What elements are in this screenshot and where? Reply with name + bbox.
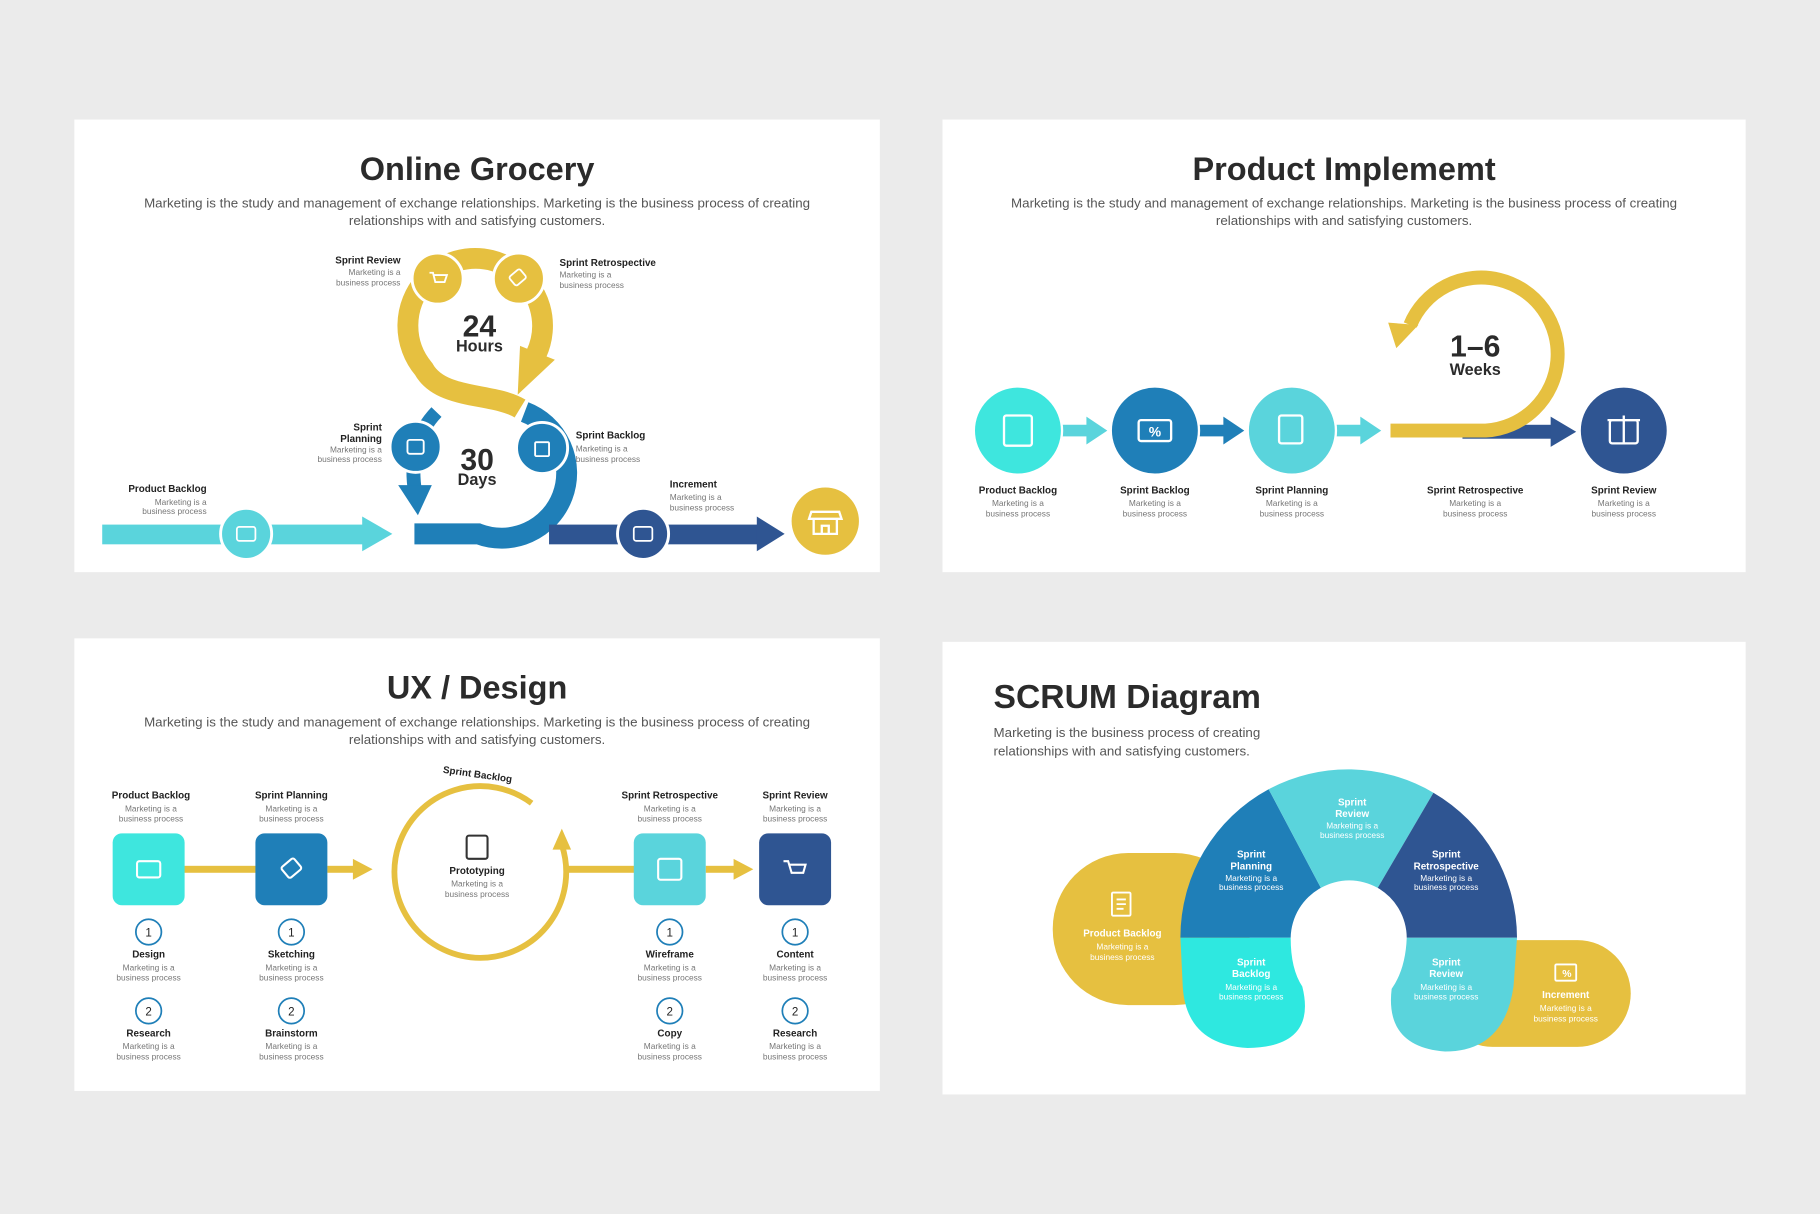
subtitle: relationships with and satisfying customers.: [994, 744, 1250, 759]
labels: Marketing is a: [1129, 498, 1181, 508]
panel: online grocery: Marketing is a: [670, 492, 722, 502]
panel: scrum diagram: %: [1562, 969, 1572, 980]
columns text: business process: [763, 973, 827, 983]
columns text: Product Backlog: [112, 791, 190, 802]
columns text: 2: [288, 1006, 295, 1019]
columns text: 2: [792, 1006, 798, 1019]
panel: product implement: %: [1149, 423, 1161, 439]
columns text: Research: [126, 1028, 171, 1039]
columns text: business process: [638, 1052, 702, 1062]
arrow: navy increment: [549, 508, 785, 559]
segment labels: Marketing is a: [1420, 873, 1473, 883]
columns text: Marketing is a: [644, 803, 696, 813]
step circles: [974, 386, 1668, 475]
yellow loop 1-6 weeks: [1388, 278, 1558, 431]
subtitle: relationships with and satisfying customers.: [349, 732, 605, 747]
panel: online grocery: Marketing is a: [559, 269, 612, 279]
text: 24 Hours: [456, 311, 503, 356]
columns text: Marketing is a: [644, 1041, 696, 1051]
small arrows: [1059, 417, 1381, 445]
segment labels: business process: [1090, 952, 1155, 962]
columns text: business process: [116, 973, 181, 983]
yellow connectors: [183, 859, 753, 880]
subtitle: Marketing is the study and management of exchange relationships. Marketing is the business process of creating: [1011, 196, 1677, 211]
labels: [979, 485, 1657, 518]
text: 1-6 weeks: Weeks: [1450, 361, 1501, 379]
arrow: cyan product backlog: [102, 508, 392, 559]
panel: online grocery: Sprint Retrospective: [559, 258, 656, 269]
columns text: Marketing is a: [769, 803, 821, 813]
columns text: Marketing is a: [123, 1041, 175, 1051]
subtitle text: Marketing is the study and management of exchange relationships. Marketing is the business process of creating: [144, 196, 810, 211]
columns text: 1: [667, 927, 673, 940]
labels: Marketing is a: [992, 498, 1044, 508]
segment labels: Retrospective: [1414, 861, 1479, 872]
segment labels: business process: [1414, 991, 1478, 1001]
labels: Marketing is a: [1266, 498, 1318, 508]
columns text: business process: [116, 1052, 181, 1062]
segment labels: Backlog: [1232, 969, 1270, 980]
labels: Marketing is a: [1449, 498, 1502, 508]
segment labels: Sprint: [1432, 850, 1461, 861]
labels grocery: business process: [317, 454, 382, 464]
panel: product implement: [942, 120, 1746, 572]
panel: online grocery: business process: [559, 280, 624, 290]
columns text: Content: [776, 950, 814, 961]
labels grocery: Marketing is a: [155, 497, 207, 507]
columns text: Marketing is a: [265, 962, 318, 972]
columns text: [112, 791, 828, 1062]
columns text: Sprint Review: [762, 791, 828, 802]
columns text: 1: [145, 927, 152, 940]
text: 1-6 weeks: 1–6: [1450, 330, 1500, 363]
columns text: Copy: [657, 1028, 683, 1039]
title: SCRUM Diagram: SCRUM Diagram: [994, 679, 1261, 716]
icons: [1112, 893, 1576, 981]
segment labels: Marketing is a: [1420, 982, 1473, 992]
columns text: Marketing is a: [265, 1041, 318, 1051]
columns text: 2: [667, 1006, 673, 1019]
segment labels: Sprint: [1237, 958, 1266, 969]
columns text: Research: [773, 1028, 817, 1039]
panel: online grocery: Sprint Backlog: [576, 431, 645, 442]
subtitle text: relationships with and satisfying customers.: [349, 213, 605, 228]
columns text: business process: [259, 973, 324, 983]
columns text: business process: [259, 1052, 324, 1062]
boxes: [113, 833, 831, 905]
columns text: Wireframe: [646, 950, 694, 961]
labels grocery: Marketing is a: [349, 267, 401, 277]
circle prototyping: Prototyping: [449, 866, 505, 877]
labels: business process: [986, 508, 1050, 518]
panel: online grocery: business process: [576, 454, 640, 464]
panel: online grocery: [74, 120, 880, 572]
labels grocery: Marketing is a: [330, 445, 382, 455]
columns text: Sprint Planning: [255, 791, 328, 802]
subtitle: Marketing is the study and management of exchange relationships. Marketing is the business process of creating: [144, 715, 810, 730]
columns text: business process: [763, 814, 827, 824]
panel: online grocery: business process: [670, 503, 734, 513]
panel: online grocery: Marketing is a: [576, 443, 628, 453]
title: Product Implememt: Product Implememt: [1192, 151, 1496, 187]
segment labels: Marketing is a: [1540, 1003, 1592, 1013]
text: 30 Days: Days: [458, 471, 496, 489]
segment labels: [1083, 797, 1598, 1023]
segment labels: Marketing is a: [1096, 941, 1149, 951]
columns text: business process: [638, 814, 702, 824]
circle prototyping: Sprint Backlog: [442, 765, 513, 785]
segment labels: Sprint: [1237, 850, 1266, 861]
text: 24 Hours: 24: [463, 311, 496, 344]
text: 30 Days: [458, 444, 496, 489]
yellow 24 hours loop: [408, 258, 555, 409]
columns text: business process: [119, 814, 183, 824]
circle prototyping: Marketing is a: [451, 879, 503, 889]
labels: business process: [1443, 508, 1507, 518]
circle prototyping: [394, 765, 571, 958]
segment labels: Increment: [1542, 990, 1590, 1001]
columns text: Marketing is a: [644, 962, 696, 972]
labels: business process: [1592, 508, 1656, 518]
columns text: 2: [145, 1006, 152, 1019]
segment labels: Review: [1335, 809, 1370, 820]
columns text: Design: [132, 950, 165, 961]
panel: ux design: [74, 638, 880, 1091]
columns text: Marketing is a: [125, 803, 177, 813]
columns text: 1: [288, 927, 295, 940]
text: 1-6 weeks: [1450, 330, 1501, 379]
blue 30 days loop: [398, 412, 567, 538]
title: UX / Design: UX / Design: [387, 670, 567, 706]
labels grocery: Sprint: [353, 423, 383, 434]
columns text: Marketing is a: [123, 962, 175, 972]
subtitle: [994, 725, 1260, 759]
navy arrow: [1462, 417, 1576, 447]
segment labels: Sprint: [1432, 958, 1461, 969]
labels: Sprint Backlog: [1120, 485, 1190, 496]
segment labels: business process: [1534, 1013, 1598, 1023]
columns text: business process: [638, 973, 702, 983]
subtitle: relationships with and satisfying customers.: [1216, 213, 1472, 228]
columns text: Brainstorm: [265, 1028, 318, 1039]
labels: business process: [1260, 508, 1324, 518]
segment labels: Sprint: [1338, 797, 1367, 808]
segment labels: business process: [1414, 882, 1478, 892]
yellow pills: [1053, 853, 1631, 1047]
circle prototyping: business process: [445, 889, 509, 899]
segment labels: Marketing is a: [1326, 821, 1379, 831]
subtitle text: [144, 196, 810, 228]
labels: Sprint Planning: [1255, 485, 1328, 496]
panel: online grocery: Increment: [670, 479, 718, 490]
columns text: business process: [763, 1052, 827, 1062]
title: Online Grocery: Online Grocery: [360, 151, 594, 187]
labels grocery: business process: [142, 506, 207, 516]
columns text: business process: [259, 814, 324, 824]
subtitle: [1011, 196, 1677, 228]
subtitle: [144, 715, 810, 747]
columns text: Marketing is a: [769, 1041, 821, 1051]
labels: Marketing is a: [1598, 498, 1650, 508]
labels: Sprint Retrospective: [1427, 485, 1524, 496]
segment labels: Marketing is a: [1225, 982, 1278, 992]
segment labels: business process: [1320, 830, 1384, 840]
columns text: Marketing is a: [769, 962, 821, 972]
segment labels: Review: [1429, 969, 1464, 980]
segment labels: Planning: [1230, 861, 1272, 872]
labels grocery: [128, 255, 401, 516]
labels: Sprint Review: [1591, 485, 1657, 496]
icon: store: [792, 487, 859, 555]
columns text: Sprint Retrospective: [622, 791, 718, 802]
icon circles: [390, 253, 568, 474]
labels: business process: [1123, 508, 1187, 518]
columns text: Sketching: [268, 950, 315, 961]
columns text: 1: [792, 927, 798, 940]
labels grocery: Planning: [340, 434, 382, 445]
segment labels: Marketing is a: [1225, 873, 1278, 883]
segment labels: Product Backlog: [1083, 929, 1162, 940]
segment labels: business process: [1219, 991, 1283, 1001]
segments: [1180, 769, 1517, 1052]
text: 30 Days: 30: [460, 444, 494, 477]
columns text: Marketing is a: [265, 803, 318, 813]
text: 24 Hours: Hours: [456, 338, 503, 356]
subtitle: Marketing is the business process of creating: [994, 725, 1260, 740]
panel: scrum diagram: [942, 642, 1746, 1094]
labels grocery: Sprint Review: [335, 255, 401, 266]
labels: Product Backlog: [979, 485, 1057, 496]
labels grocery: Product Backlog: [128, 484, 207, 495]
segment labels: business process: [1219, 882, 1283, 892]
labels grocery: business process: [336, 278, 400, 288]
